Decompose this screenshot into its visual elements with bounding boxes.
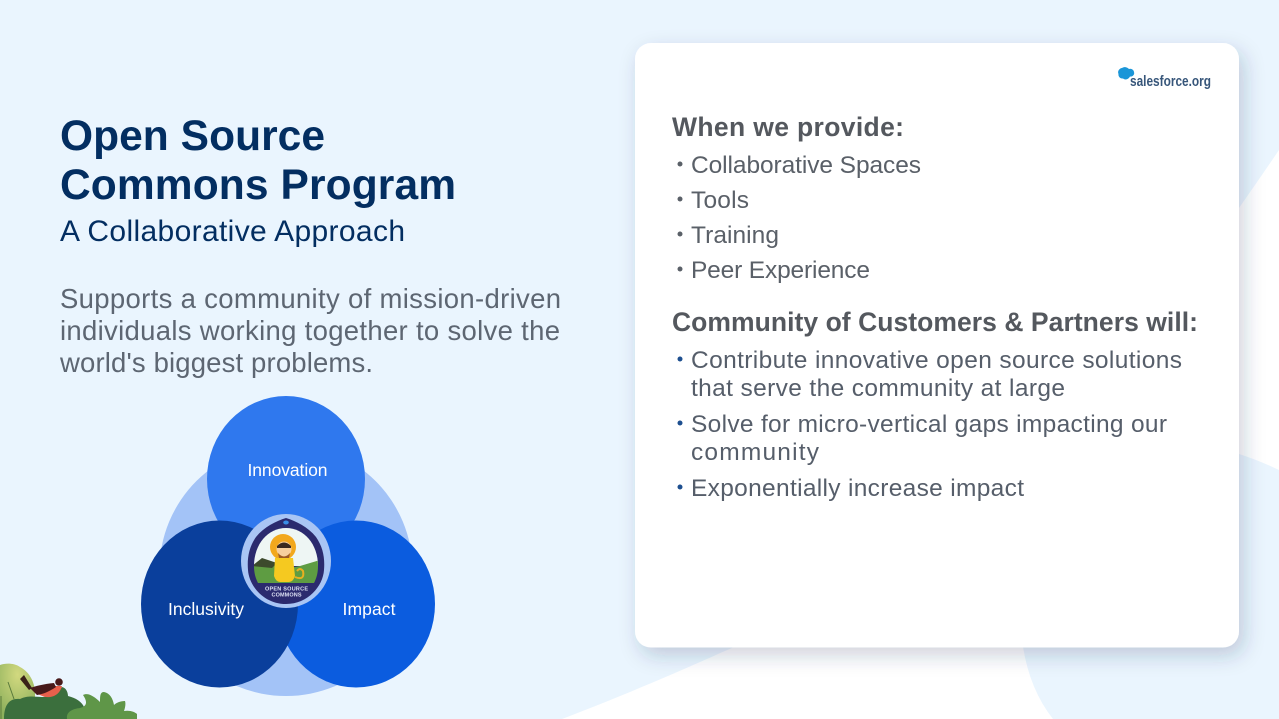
list <box>678 347 1182 502</box>
list: Solve for micro-vertical gaps impacting our <box>691 411 1167 438</box>
panel: card <box>635 43 1239 648</box>
mascot <box>270 534 303 582</box>
description: world's biggest problems. <box>59 347 373 378</box>
plant illustration <box>0 664 137 719</box>
card background <box>635 43 1239 648</box>
list: Training <box>691 222 779 249</box>
bird back <box>30 683 56 695</box>
bird head <box>55 678 63 686</box>
badge scene <box>254 528 318 583</box>
list: Peer Experience <box>691 257 870 284</box>
heading: When we provide: <box>672 112 904 142</box>
badge label: COMMONS <box>272 592 302 598</box>
badge ring <box>241 514 331 608</box>
title: Commons Program <box>60 162 456 209</box>
bird <box>20 675 63 697</box>
description: Supports a community of mission-driven <box>60 283 561 314</box>
salesforce.org logo: salesforce.org <box>1130 73 1211 90</box>
open source commons badge <box>241 514 331 608</box>
list: community <box>691 439 820 466</box>
list: Tools <box>691 187 749 214</box>
outer light circle <box>160 444 412 696</box>
badge body <box>248 518 324 604</box>
subtitle: A Collaborative Approach <box>60 215 405 248</box>
section: when we provide <box>672 112 921 284</box>
circle: innovation <box>207 396 365 562</box>
circle: inclusivity <box>141 520 298 688</box>
badge label <box>265 586 308 598</box>
badge label: OPEN SOURCE <box>265 586 308 592</box>
light green leaves <box>67 692 137 719</box>
salesforce.org logo <box>1118 67 1211 90</box>
circle: impact: Impact <box>342 599 396 619</box>
list <box>678 152 921 284</box>
dark green bush <box>4 687 84 719</box>
list: Collaborative Spaces <box>691 152 921 179</box>
background white swoosh <box>562 150 1279 719</box>
venn diagram <box>141 396 435 696</box>
bush stems <box>1 682 14 719</box>
bird belly <box>31 686 62 697</box>
badge cloud <box>283 520 289 524</box>
list: that serve the community at large <box>691 375 1065 402</box>
bird tail <box>20 675 32 690</box>
section: community will <box>672 307 1198 502</box>
circle: innovation: Innovation <box>248 460 328 480</box>
description: individuals working together to solve the <box>60 315 560 346</box>
list: Contribute innovative open source solutions <box>691 347 1182 374</box>
heading: Community of Customers & Partners will: <box>672 307 1198 337</box>
description <box>59 283 561 378</box>
title <box>60 113 456 209</box>
list: Exponentially increase impact <box>691 475 1024 502</box>
circle: inclusivity: Inclusivity <box>168 599 244 619</box>
logo cloud <box>1118 67 1134 79</box>
lime bush <box>0 664 35 719</box>
title: Open Source <box>60 113 325 160</box>
circle: impact <box>277 520 435 688</box>
